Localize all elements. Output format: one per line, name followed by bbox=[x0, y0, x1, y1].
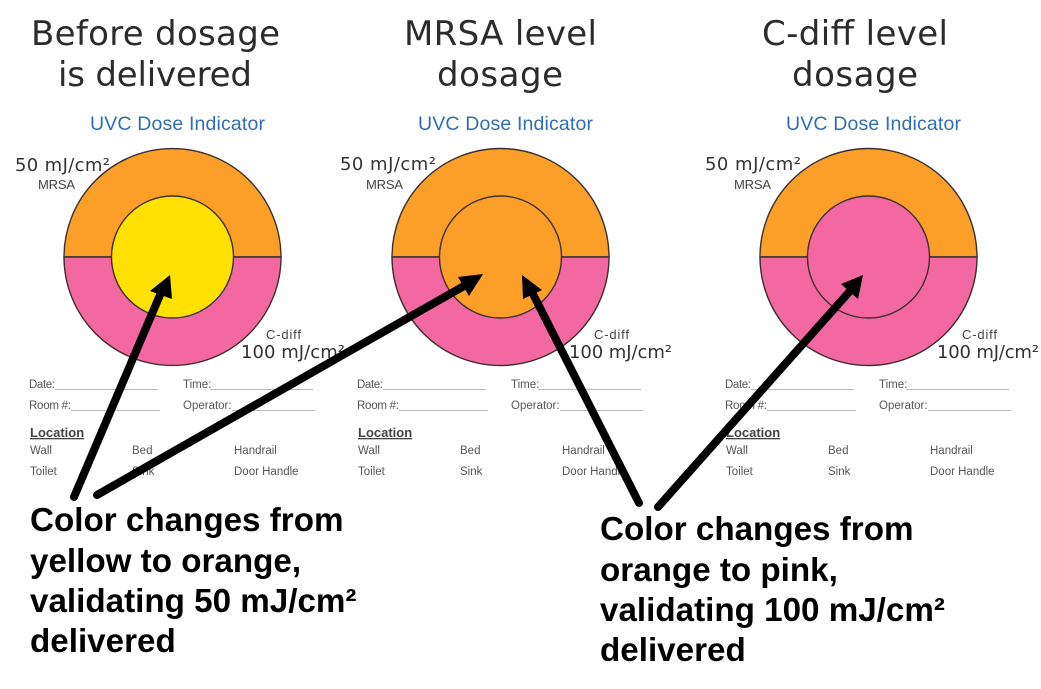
arrow: to MRSA orange centre bbox=[97, 274, 483, 495]
C-diff label bbox=[241, 327, 345, 363]
form fields: Wall bbox=[358, 445, 380, 457]
form fields: Toilet bbox=[30, 466, 58, 478]
indicator panel: before dosage bbox=[15, 113, 345, 478]
C-diff label bbox=[569, 327, 672, 363]
heading: C-diff level dosage bbox=[762, 14, 948, 95]
C-diff label: 100 mJ/cm² bbox=[937, 342, 1039, 363]
form fields: Bed bbox=[460, 445, 480, 457]
form fields: Date: bbox=[725, 379, 751, 391]
indicator title: UVC Dose Indicator bbox=[786, 113, 962, 135]
form fields: Sink bbox=[460, 466, 483, 478]
form fields: Door Handle bbox=[562, 466, 627, 478]
form fields: Bed bbox=[828, 445, 848, 457]
form fields: Location bbox=[358, 425, 412, 440]
callout: yellow to orange: delivered bbox=[30, 623, 176, 660]
callout: orange to pink: Color changes from bbox=[600, 511, 913, 548]
dial: yellow centre bbox=[64, 149, 281, 365]
MRSA label: MRSA bbox=[734, 177, 771, 192]
arrow: from orange to centre bbox=[522, 275, 639, 503]
dial: pink centre bbox=[760, 148, 977, 366]
heading: before dosage bbox=[31, 14, 280, 95]
MRSA label: MRSA bbox=[38, 177, 75, 192]
heading: before dosage: Before dosage bbox=[31, 14, 280, 54]
form fields: Date: bbox=[357, 379, 383, 391]
C-diff label: C-diff bbox=[266, 327, 301, 342]
indicator title: UVC Dose Indicator bbox=[418, 113, 594, 135]
form fields: Handrail bbox=[234, 445, 277, 457]
indicator panel: C-diff level bbox=[705, 113, 1039, 478]
form fields: Location bbox=[30, 425, 84, 440]
form fields: Date: bbox=[29, 379, 55, 391]
MRSA label: 50 mJ/cm² bbox=[705, 154, 801, 175]
C-diff label: C-diff bbox=[962, 327, 997, 342]
form fields: Operator: bbox=[183, 400, 232, 412]
callout: orange to pink bbox=[600, 511, 945, 669]
form fields: Wall bbox=[30, 445, 52, 457]
heading: before dosage: is delivered bbox=[58, 55, 252, 95]
form fields: Room #: bbox=[725, 400, 767, 412]
form fields: Location bbox=[726, 425, 780, 440]
form fields: Toilet bbox=[726, 466, 754, 478]
form fields: Room #: bbox=[29, 400, 71, 412]
heading: MRSA level dosage bbox=[404, 14, 597, 95]
heading: MRSA level dosage: MRSA level bbox=[404, 14, 597, 54]
C-diff label: 100 mJ/cm² bbox=[241, 342, 345, 363]
MRSA label bbox=[15, 155, 110, 192]
C-diff label bbox=[937, 327, 1039, 363]
form fields: Room #: bbox=[357, 400, 399, 412]
form fields bbox=[357, 379, 643, 478]
indicator panel: MRSA level bbox=[340, 113, 672, 478]
callout: orange to pink: delivered bbox=[600, 632, 746, 669]
callout: orange to pink: validating 100 mJ/cm² bbox=[600, 592, 945, 629]
MRSA label: 50 mJ/cm² bbox=[15, 155, 110, 176]
arrow: to yellow centre bbox=[74, 275, 172, 497]
form fields: Time: bbox=[183, 379, 211, 391]
form fields: Time: bbox=[511, 379, 539, 391]
heading: MRSA level dosage: dosage bbox=[437, 55, 563, 95]
C-diff label: 100 mJ/cm² bbox=[569, 342, 672, 363]
arrow: to pink centre bbox=[658, 275, 863, 507]
heading: C-diff level dosage: dosage bbox=[792, 55, 918, 95]
form fields: Wall bbox=[726, 445, 748, 457]
MRSA label: MRSA bbox=[366, 177, 403, 192]
MRSA label bbox=[340, 154, 436, 192]
form fields: Bed bbox=[132, 445, 152, 457]
form fields: Door Handle bbox=[930, 466, 995, 478]
form fields: Door Handle bbox=[234, 466, 299, 478]
form fields: Sink bbox=[828, 466, 851, 478]
callout: yellow to orange: Color changes from bbox=[30, 502, 343, 539]
MRSA label: 50 mJ/cm² bbox=[340, 154, 436, 175]
callout: yellow to orange: yellow to orange, bbox=[30, 543, 301, 580]
callout: orange to pink: orange to pink, bbox=[600, 552, 838, 589]
form fields bbox=[725, 379, 1011, 478]
form fields: Time: bbox=[879, 379, 907, 391]
form fields: Toilet bbox=[358, 466, 386, 478]
heading: C-diff level dosage: C-diff level bbox=[762, 14, 948, 54]
form fields: Sink bbox=[132, 466, 155, 478]
indicator title: UVC Dose Indicator bbox=[90, 113, 266, 135]
form fields: Handrail bbox=[562, 445, 605, 457]
callout: yellow to orange: validating 50 mJ/cm² bbox=[30, 583, 356, 620]
form fields: Handrail bbox=[930, 445, 973, 457]
form fields: Operator: bbox=[511, 400, 560, 412]
form fields bbox=[29, 379, 315, 478]
C-diff label: C-diff bbox=[594, 327, 629, 342]
callout: yellow to orange bbox=[30, 502, 356, 660]
MRSA label bbox=[705, 154, 801, 192]
dial: orange centre bbox=[392, 148, 609, 366]
form fields: Operator: bbox=[879, 400, 928, 412]
